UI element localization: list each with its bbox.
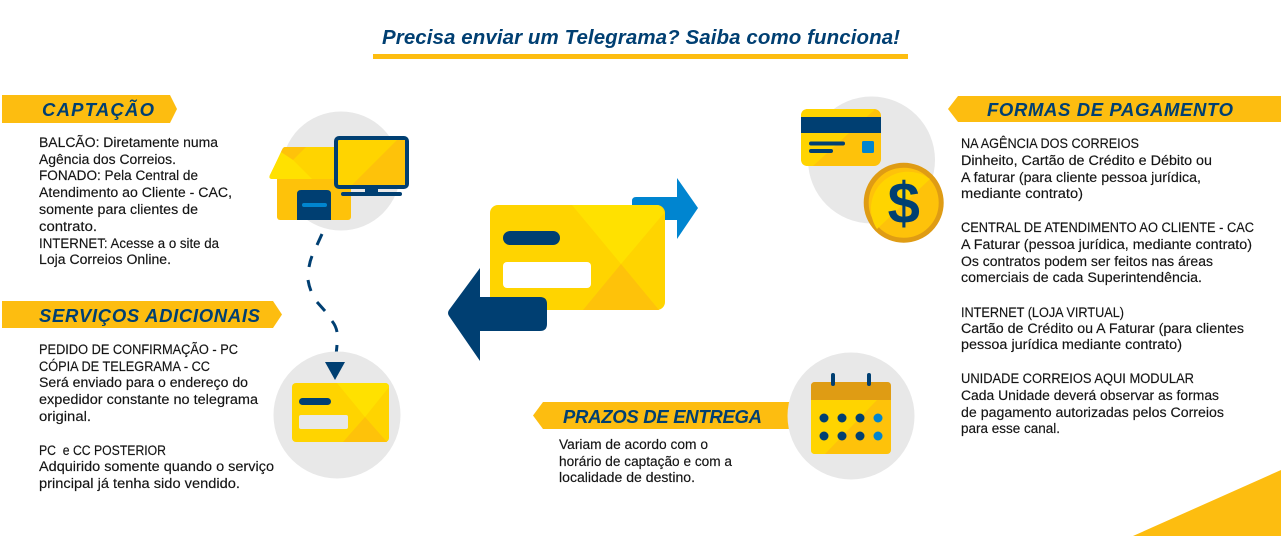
- text block: serviços adicionais: PC e CC POSTERIOR: [39, 443, 166, 458]
- text block: prazos de entrega: Variam de acordo com o: [559, 437, 708, 452]
- icon: credit card and coin: $: [888, 171, 920, 236]
- text block: formas de pagamento: [961, 136, 1254, 436]
- text block: prazos de entrega: horário de captação e com a: [559, 454, 732, 469]
- icon: central envelope with arrows: [448, 178, 698, 361]
- text block: captação: [39, 135, 232, 267]
- text block: formas de pagamento: UNIDADE CORREIOS AQUI MODULAR: [961, 371, 1194, 386]
- text block: captação: contrato.: [39, 219, 97, 234]
- title: Precisa enviar um Telegrama? Saiba como funciona!: [382, 26, 900, 49]
- icon: credit card and coin: [801, 96, 941, 240]
- text block: captação: INTERNET: Acesse a o site da: [39, 236, 219, 251]
- text block: captação: Loja Correios Online.: [39, 252, 171, 267]
- text block: formas de pagamento: CENTRAL DE ATENDIMENTO AO CLIENTE - CAC: [961, 220, 1254, 235]
- icon: calendar: [788, 352, 914, 480]
- text block: formas de pagamento: de pagamento autorizadas pelos Correios: [961, 405, 1224, 420]
- text block: formas de pagamento: Dinheito, Cartão de Crédito e Débito ou: [961, 153, 1212, 168]
- heading: formas de pagamento: FORMAS DE PAGAMENTO: [987, 99, 1234, 120]
- text block: captação: somente para clientes de: [39, 202, 198, 217]
- arrowhead: dashed connector tip: [325, 362, 345, 380]
- text block: formas de pagamento: A Faturar (pessoa jurídica, mediante contrato): [961, 237, 1252, 252]
- heading: prazos de entrega: PRAZOS DE ENTREGA: [563, 406, 762, 427]
- heading: captação: CAPTAÇÃO: [42, 99, 155, 120]
- text block: serviços adicionais: Será enviado para o endereço do: [39, 375, 248, 390]
- title: [373, 26, 908, 59]
- heading: serviços adicionais: SERVIÇOS ADICIONAIS: [39, 305, 261, 326]
- dashed connector arrow: [308, 234, 337, 356]
- text block: serviços adicionais: expedidor constante no telegrama: [39, 392, 259, 407]
- text block: formas de pagamento: INTERNET (LOJA VIRTUAL): [961, 305, 1124, 320]
- text block: captação: Agência dos Correios.: [39, 152, 176, 167]
- text block: formas de pagamento: NA AGÊNCIA DOS CORREIOS: [961, 136, 1139, 151]
- text block: formas de pagamento: Os contratos podem ser feitos nas áreas: [961, 254, 1213, 269]
- text block: captação: Atendimento ao Cliente - CAC,: [39, 185, 232, 200]
- corner triangle: [1133, 470, 1281, 536]
- heading: formas de pagamento: [948, 96, 1281, 122]
- text block: serviços adicionais: Adquirido somente quando o serviço: [39, 459, 274, 474]
- text block: captação: FONADO: Pela Central de: [39, 168, 198, 183]
- text block: formas de pagamento: mediante contrato): [961, 186, 1083, 201]
- text block: prazos de entrega: [559, 437, 732, 485]
- text block: serviços adicionais: principal já tenha sido vendido.: [39, 476, 240, 491]
- text block: formas de pagamento: comerciais de cada Superintendência.: [961, 270, 1202, 285]
- heading: serviços adicionais: [2, 301, 282, 328]
- text block: serviços adicionais: CÓPIA DE TELEGRAMA - CC: [39, 359, 210, 374]
- text block: formas de pagamento: Cartão de Crédito ou A Faturar (para clientes: [961, 321, 1244, 336]
- heading: prazos de entrega: [533, 402, 795, 429]
- text block: captação: BALCÃO: Diretamente numa: [39, 135, 219, 150]
- text block: serviços adicionais: original.: [39, 409, 91, 424]
- heading: captação: [2, 95, 177, 123]
- text block: serviços adicionais: [39, 342, 274, 491]
- text block: prazos de entrega: localidade de destino.: [559, 470, 695, 485]
- text block: formas de pagamento: para esse canal.: [961, 421, 1060, 436]
- text block: serviços adicionais: PEDIDO DE CONFIRMAÇÃO - PC: [39, 342, 238, 357]
- text block: formas de pagamento: A faturar (para cliente pessoa jurídica,: [961, 170, 1201, 185]
- icon: small envelope: [274, 352, 400, 478]
- text block: formas de pagamento: pessoa jurídica mediante contrato): [961, 337, 1182, 352]
- text block: formas de pagamento: Cada Unidade deverá observar as formas: [961, 388, 1219, 403]
- icon: store and computer: [269, 112, 407, 230]
